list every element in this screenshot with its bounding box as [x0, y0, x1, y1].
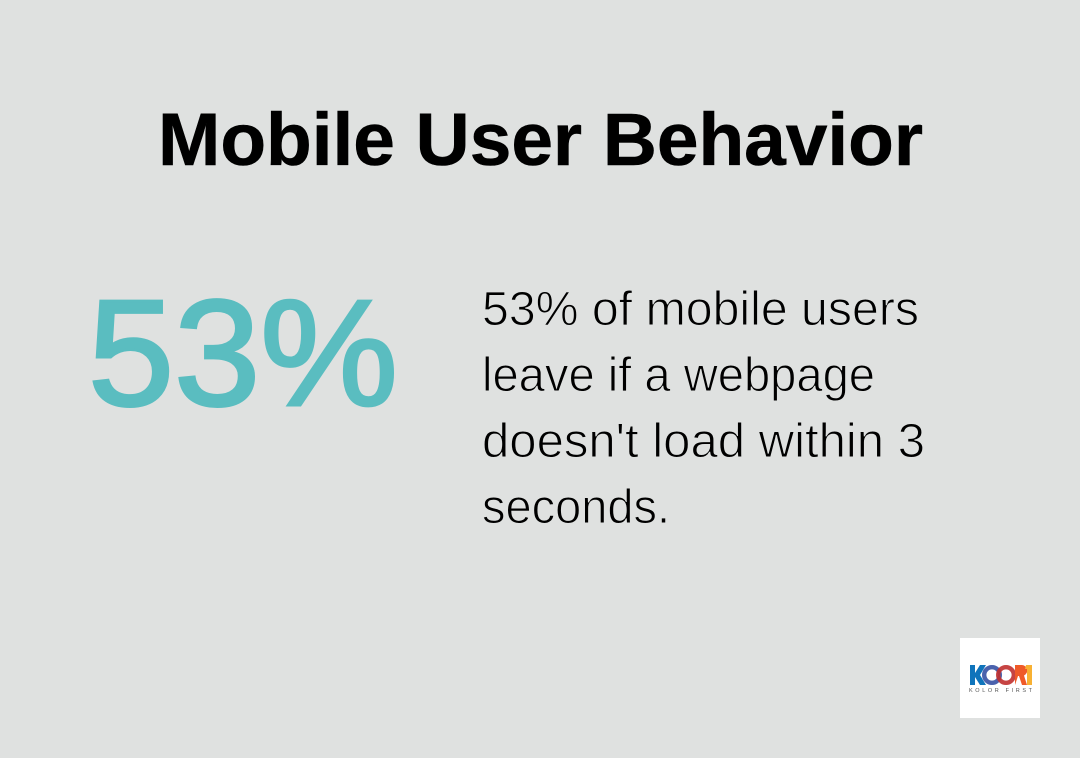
logo letter K	[970, 665, 986, 685]
logo letter O, blue-purple	[984, 667, 1000, 683]
description text: 53% of mobile users	[482, 283, 919, 336]
description text: doesn't load within 3	[482, 415, 925, 468]
logo tagline: KOLOR FIRST	[969, 688, 1033, 694]
logo letter O, purple-red	[998, 667, 1014, 683]
logo numeral 1	[1025, 665, 1032, 685]
logo: Koor1 Kolor First	[960, 638, 1040, 718]
big statistic: 53%: 53%	[88, 268, 398, 437]
logo letter R	[1015, 665, 1027, 685]
description text: seconds.	[482, 481, 670, 534]
description text	[482, 283, 925, 534]
title: Mobile User Behavior	[158, 98, 923, 181]
description text: leave if a webpage	[482, 349, 875, 402]
